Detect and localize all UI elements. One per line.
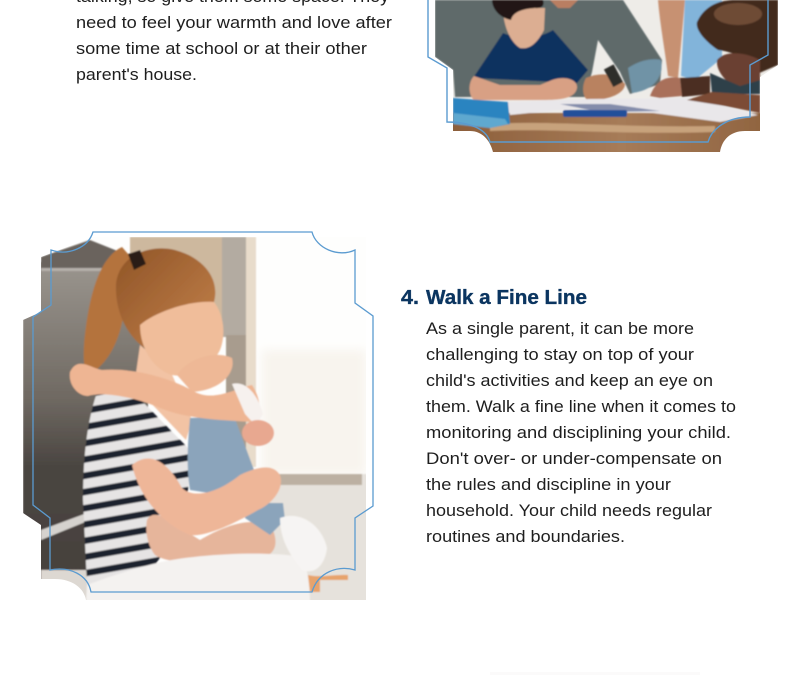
boy's navy shirt (473, 30, 588, 83)
white trousers (86, 554, 310, 602)
window glow (262, 350, 366, 475)
striped shirt (83, 385, 192, 585)
mother's arm (132, 458, 281, 535)
text block: tip 3 ending: parent's house. (76, 65, 197, 84)
mother's hand (242, 420, 274, 446)
text block: tip 4 body: routines and boundaries. (426, 527, 625, 546)
denim overalls (188, 416, 257, 496)
text block: tip 4 body (426, 319, 736, 546)
child's legs (146, 515, 276, 563)
girl's hair (697, 0, 778, 74)
hair (116, 248, 215, 350)
denim shorts (245, 503, 285, 535)
text block: tip 4 body: monitoring and disciplining your child. (426, 423, 731, 442)
frame: lower photo outline (33, 232, 373, 592)
boy's face (503, 8, 545, 48)
child's arm (70, 364, 260, 422)
hair ponytail (83, 246, 130, 369)
text block: tip 4 body: household. Your child needs regular (426, 501, 712, 520)
girl's face (717, 53, 760, 88)
man's sleeve cuff (628, 59, 662, 93)
text block: tip 4 body: challenging to stay on top of your (426, 345, 694, 364)
next photo top edge, faint (490, 672, 700, 675)
pencil case (453, 98, 510, 128)
woman's blue dress (681, 0, 722, 80)
cabinet (23, 262, 148, 602)
child's white top (232, 383, 263, 426)
man's chin (550, 0, 578, 8)
boy's arms (470, 76, 577, 100)
boy's hair (492, 0, 544, 20)
photo: parent and children reading at table (430, 0, 780, 158)
shelves (129, 237, 223, 319)
child's head (177, 355, 233, 392)
photo: mother hugging child (20, 230, 370, 604)
text block: tip 3 ending: some time at school or at their other (76, 39, 367, 58)
open book (508, 98, 758, 122)
toes (308, 575, 348, 592)
table (453, 112, 760, 152)
text block: tip 3 ending (76, 0, 392, 84)
floor (270, 474, 366, 600)
text block: tip 3 ending: need to feel your warmth and love after (76, 13, 392, 32)
man's grey shirt (435, 0, 662, 97)
man's watch (604, 64, 623, 87)
woman's arm (658, 0, 685, 78)
girl's plaid shirt (710, 73, 760, 94)
text block: tip 4 body: them. Walk a fine line when it comes to (426, 397, 736, 416)
text block: tip 4 body: As a single parent, it can be more (426, 319, 694, 338)
girl's hand (650, 77, 682, 98)
mother's neck and chest (135, 345, 192, 440)
girl's arm (687, 92, 760, 113)
text block: tip 4 body: the rules and discipline in your (426, 475, 671, 494)
hair tie (128, 250, 146, 270)
text block: tip 4 body: child's activities and keep an eye on (426, 371, 713, 390)
white knee (280, 516, 327, 571)
man's hand (583, 74, 625, 100)
heading: Walk a Fine Line: Walk a Fine Line (426, 286, 587, 309)
pen (563, 110, 627, 117)
text block: tip 4 body: Don't over- or under-compensate on (426, 449, 722, 468)
cabinet lower edge (41, 514, 85, 541)
mother's face (140, 302, 223, 376)
heading: Walk a Fine Line: 4. (401, 286, 419, 309)
frame: top photo outline (428, 0, 768, 142)
